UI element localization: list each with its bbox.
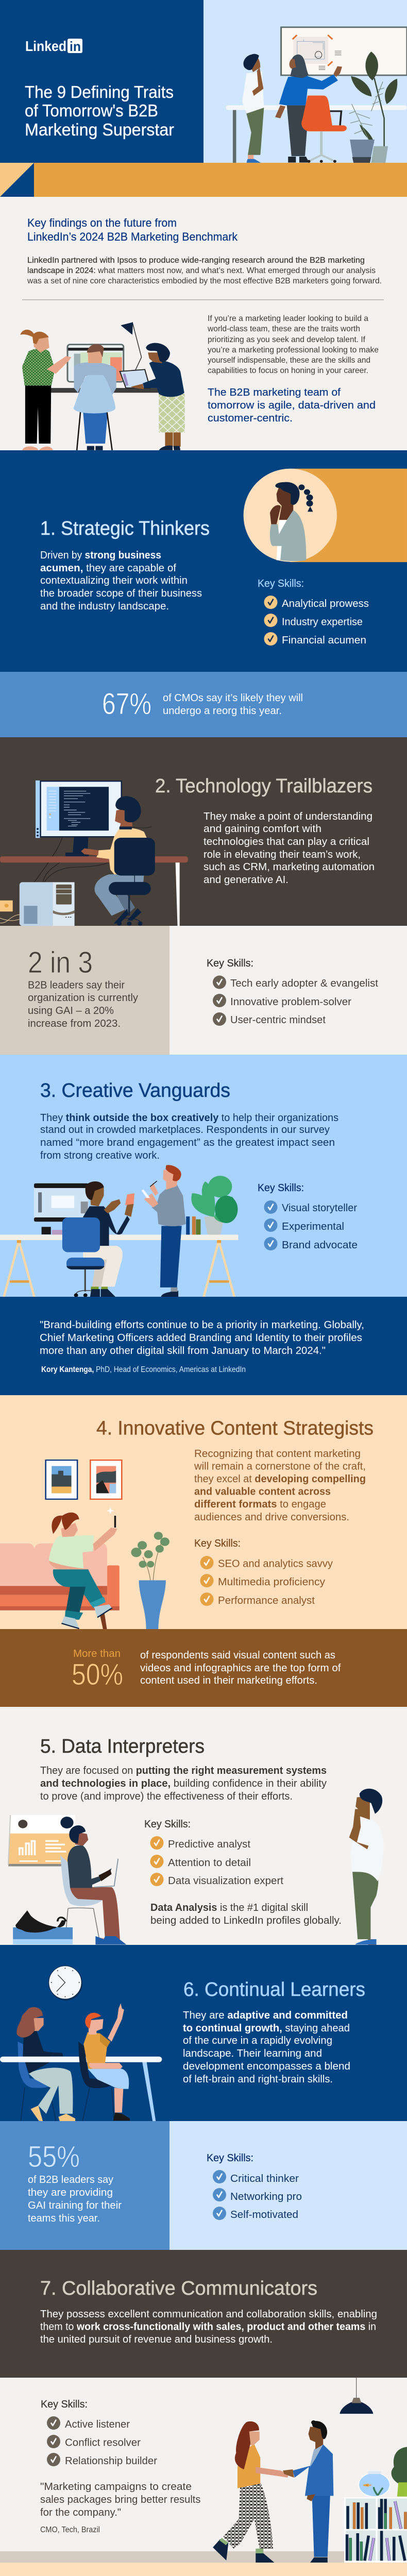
text: why it matters bbox=[207, 314, 379, 375]
body text: named “more brand engagement” as the greatest impact seen bbox=[40, 1137, 335, 1148]
illustration: woman on sofa with phone bbox=[0, 1460, 169, 1629]
heading: 4. Innovative Content Strategists bbox=[96, 1418, 374, 1439]
key skills: User-centric mindset bbox=[230, 1014, 326, 1026]
key skills: SEO and analytics savvy bbox=[218, 1558, 333, 1570]
stat: 2 in 3: 2 in 3 bbox=[28, 946, 93, 979]
quote text bbox=[40, 1319, 364, 1357]
panel: 6 continual learners bbox=[0, 1945, 407, 2121]
key skills: Key Skills: bbox=[207, 2152, 253, 2164]
text: why it matters: yourself indispensable, these are the skills and bbox=[208, 356, 370, 365]
panel: 8 visionary chief marketing officers bbox=[0, 2563, 407, 2576]
chair bbox=[330, 111, 341, 125]
body text bbox=[194, 1448, 366, 1523]
stat band: more than 50%: videos and infographics are the top form of bbox=[140, 1663, 341, 1674]
stat: 55%: 55% bbox=[28, 2140, 80, 2174]
body text: and generative AI. bbox=[204, 874, 289, 886]
quote: for the company." bbox=[40, 2507, 121, 2518]
seated person bbox=[84, 1269, 86, 1292]
panel: 1 strategic thinkers bbox=[0, 450, 407, 672]
stat: 55%: GAI training for their bbox=[28, 2200, 122, 2211]
heading: 5. Data Interpreters bbox=[40, 1736, 205, 1757]
body text: Recognizing that content marketing bbox=[194, 1448, 361, 1460]
stat band: more than 50%: More than bbox=[73, 1648, 121, 1659]
body text: Driven by strong business bbox=[40, 550, 161, 561]
key skills: Innovative problem-solver bbox=[230, 996, 351, 1008]
key skills: Critical thinker bbox=[230, 2173, 299, 2184]
body text: to prove (and improve) the effectiveness of their efforts. bbox=[40, 1791, 293, 1802]
intro paragraph bbox=[27, 256, 382, 285]
title: Marketing Superstar bbox=[25, 120, 174, 139]
panel: 7 collaborative communicators bbox=[0, 2250, 407, 2378]
title: The 9 Defining Traits bbox=[25, 82, 174, 101]
text: why it matters: prioritizing as you seek and develop talent. If bbox=[208, 335, 366, 344]
stat: 55%: they are providing bbox=[28, 2187, 113, 2198]
key skills bbox=[207, 957, 378, 1026]
body text: the united pursuit of revenue and business growth. bbox=[40, 2334, 273, 2345]
intro paragraph: was a set of nine core characteristics embodied by the most effective B2B marketers going forward. bbox=[27, 277, 382, 285]
body text: the broader scope of their business bbox=[40, 588, 202, 599]
stat: 2 in 3: using GAI – a 20% bbox=[28, 1005, 114, 1016]
woman bbox=[223, 2484, 273, 2549]
illustration: analyst at laptop with dog bbox=[8, 1815, 126, 1945]
body text: role in elevating their team’s work, bbox=[204, 849, 361, 860]
attribution: Kory Kantenga, PhD, Head of Economics, Americas at LinkedIn bbox=[41, 1365, 246, 1374]
key skills: Key Skills: bbox=[258, 578, 304, 589]
body text bbox=[40, 1765, 327, 1802]
person A bbox=[246, 108, 264, 155]
illustration: team around a laptop bbox=[20, 322, 185, 450]
heading: 1. Strategic Thinkers bbox=[40, 518, 210, 539]
body text: of the curve in a rapidly evolving bbox=[183, 2035, 332, 2046]
stat: 55%: of B2B leaders say bbox=[28, 2174, 113, 2185]
key skills bbox=[207, 2152, 302, 2221]
body text: contextualizing their work within bbox=[40, 575, 188, 586]
body text: They are focused on putting the right measurement systems bbox=[40, 1765, 327, 1776]
body text: they excel at developing compelling bbox=[194, 1473, 366, 1485]
text: why it matters: If you’re a marketing leader looking to build a bbox=[208, 314, 368, 323]
key skills: Key Skills: bbox=[144, 1818, 191, 1830]
person bbox=[95, 874, 144, 916]
body text: will remain a cornerstone of the craft, bbox=[194, 1461, 366, 1472]
quote: sales packages bring better results bbox=[40, 2494, 201, 2505]
body text: and gaining comfort with bbox=[204, 823, 321, 835]
key skills: Key Skills: bbox=[258, 1182, 304, 1194]
body text: They are adaptive and committed bbox=[183, 2010, 348, 2021]
heading: 7. Collaborative Communicators bbox=[40, 2278, 317, 2299]
heading: key findings bbox=[27, 216, 238, 243]
laptop bbox=[120, 369, 150, 388]
stat band: more than 50% bbox=[0, 1629, 407, 1707]
title: of Tomorrow's B2B bbox=[25, 101, 158, 120]
body text: and technologies in place, building confidence in their ability bbox=[40, 1778, 327, 1789]
illustration: thinker in circle bbox=[244, 469, 407, 562]
key skills: Attention to detail bbox=[168, 1857, 251, 1869]
key skills: Key Skills: bbox=[207, 957, 253, 969]
key skills: Performance analyst bbox=[218, 1595, 315, 1606]
key skills: Visual storyteller bbox=[282, 1202, 357, 1214]
key skills: Key Skills: bbox=[41, 2398, 88, 2410]
panel: 2 stat and key skills bbox=[0, 926, 378, 1055]
body text: landscape. Their learning and bbox=[183, 2048, 322, 2059]
key skills: Multimedia proficiency bbox=[218, 1577, 325, 1588]
orange band with triangle bbox=[0, 163, 407, 197]
panel: 6 stat and key skills bbox=[0, 2121, 407, 2250]
body text: development encompasses a blend bbox=[183, 2061, 350, 2072]
key skills: Predictive analyst bbox=[168, 1839, 250, 1850]
panel: quote from Kory Kantenga bbox=[0, 1297, 407, 1395]
intro paragraph: landscape in 2024: what matters most now, and what’s next. What emerged through our analysis bbox=[27, 266, 376, 275]
quote: "Marketing campaigns to create bbox=[40, 2481, 192, 2493]
text: why it matters: you’re a marketing professional looking to make bbox=[208, 346, 379, 354]
callout: data analysis: Data Analysis is the #1 digital skill bbox=[150, 1902, 308, 1913]
body text: They make a point of understanding bbox=[204, 811, 372, 822]
stat: 2 in 3: increase from 2023. bbox=[28, 1018, 121, 1029]
right person bbox=[159, 394, 185, 432]
logo: LinkedIn: Linked bbox=[25, 38, 66, 54]
panel: 2 technology trailblazers bbox=[0, 737, 407, 926]
body text bbox=[183, 2010, 350, 2085]
panel: 7 key skills and handshake bbox=[0, 2378, 407, 2563]
body text bbox=[40, 1112, 338, 1161]
stat: 55%: teams this year. bbox=[28, 2213, 100, 2224]
key skills bbox=[258, 1182, 358, 1251]
body text: technologies that can play a critical bbox=[204, 836, 369, 848]
key skills: Active listener bbox=[65, 2419, 130, 2430]
body text: They possess excellent communication and collaboration skills, enabling bbox=[40, 2309, 377, 2320]
body text: and valuable content across bbox=[194, 1486, 331, 1498]
quote text: Chief Marketing Officers added Branding and Identity to their profiles bbox=[40, 1332, 362, 1344]
body text: stand out in crowded marketplaces. Respondents in our survey bbox=[40, 1124, 330, 1136]
stat band: 67% bbox=[0, 672, 407, 737]
body text: them to work cross-functionally with sales, product and other teams in bbox=[40, 2321, 376, 2333]
callout: data analysis bbox=[150, 1902, 342, 1926]
heading: key findings: Key findings on the future from bbox=[27, 216, 177, 229]
key skills: Relationship builder bbox=[65, 2455, 157, 2467]
panel: header bbox=[0, 0, 407, 163]
body text bbox=[40, 550, 202, 612]
callout: team of tomorrow: tomorrow is agile, data-driven and bbox=[208, 400, 376, 411]
illustration: two colleagues at a whiteboard bbox=[226, 27, 407, 163]
key skills: Self-motivated bbox=[230, 2209, 298, 2221]
title bbox=[25, 82, 174, 139]
key skills: Networking pro bbox=[230, 2191, 302, 2202]
right student bbox=[82, 2088, 114, 2121]
stat: 55% bbox=[28, 2140, 122, 2224]
body text: acumen, they are capable of bbox=[40, 563, 176, 574]
stat: 2 in 3: B2B leaders say their bbox=[28, 980, 125, 991]
illustration: classroom with clock bbox=[0, 1966, 162, 2121]
logo: LinkedIn: in bbox=[70, 39, 81, 54]
stat band: more than 50%: 50% bbox=[72, 1658, 123, 1691]
heading: 6. Continual Learners bbox=[183, 1979, 365, 2001]
body text bbox=[204, 811, 375, 886]
illustration: standing person thinking bbox=[349, 1789, 384, 1945]
key skills: Tech early adopter & evangelist bbox=[230, 978, 378, 989]
key skills bbox=[194, 1537, 333, 1606]
key skills: Data visualization expert bbox=[168, 1875, 283, 1887]
stat band: more than 50%: content used in their marketing efforts. bbox=[140, 1675, 317, 1686]
body text: and the industry landscape. bbox=[40, 601, 169, 612]
key skills: Brand advocate bbox=[282, 1240, 358, 1251]
key skills: Experimental bbox=[282, 1221, 344, 1232]
stat band: 67%: 67% bbox=[102, 687, 151, 721]
text: why it matters: world-class team, these are the traits worth bbox=[207, 325, 360, 333]
body text: of left-brain and right-brain skills. bbox=[183, 2074, 333, 2085]
stat band: 67%: undergo a reorg this year. bbox=[163, 705, 282, 717]
key skills: Key Skills: bbox=[194, 1537, 241, 1549]
stat band: more than 50%: of respondents said visual content such as bbox=[140, 1650, 335, 1661]
key skills: Analytical prowess bbox=[282, 598, 369, 609]
quote: CMO, Tech, Brazil bbox=[40, 2526, 100, 2534]
callout: data analysis: being added to LinkedIn profiles globally. bbox=[150, 1915, 342, 1926]
stat: 2 in 3: organization is currently bbox=[28, 992, 138, 1004]
standing person bbox=[160, 1226, 182, 1287]
heading: 2. Technology Trailblazers bbox=[155, 775, 372, 797]
panel: 5 data interpreters bbox=[8, 1736, 383, 1945]
key skills: Conflict resolver bbox=[65, 2437, 141, 2448]
panel: 3 creative vanguards bbox=[0, 1055, 407, 1297]
illustration: handshake with bookcase bbox=[213, 2378, 407, 2563]
key skills: Industry expertise bbox=[282, 616, 363, 628]
key skills bbox=[41, 2398, 157, 2467]
body text: such as CRM, marketing automation bbox=[204, 861, 375, 873]
quote text: more than any other digital skill from January to March 2024." bbox=[40, 1345, 326, 1357]
body text: from strong creative work. bbox=[40, 1150, 160, 1161]
illustration: developer at desk bbox=[0, 781, 188, 926]
body text: audiences and drive conversions. bbox=[194, 1512, 349, 1523]
left student bbox=[21, 2088, 56, 2121]
text: why it matters: capabilities to focus on honing in your career. bbox=[208, 366, 368, 375]
person B bbox=[287, 105, 309, 156]
key skills bbox=[144, 1818, 283, 1887]
callout: team of tomorrow: The B2B marketing team of bbox=[208, 387, 341, 398]
heading: 3. Creative Vanguards bbox=[40, 1080, 230, 1101]
intro paragraph: LinkedIn partnered with Ipsos to produce wide-ranging research around the B2B marketing bbox=[27, 256, 365, 265]
body text bbox=[40, 2309, 377, 2345]
stat: 2 in 3 bbox=[28, 946, 138, 1029]
body text: They think outside the box creatively to help their organizations bbox=[40, 1112, 338, 1124]
stat band: 67%: of CMOs say it’s likely they will bbox=[163, 692, 303, 704]
left person bbox=[25, 384, 51, 444]
quote bbox=[40, 2481, 201, 2534]
illustration: creative team at desk bbox=[0, 1165, 238, 1297]
panel: intro bbox=[20, 216, 384, 450]
panel: 4 innovative content strategists bbox=[0, 1395, 407, 1629]
body text: to continual growth, staying ahead bbox=[183, 2023, 350, 2034]
callout: team of tomorrow: customer-centric. bbox=[208, 413, 293, 424]
body text: different formats to engage bbox=[194, 1499, 326, 1510]
key skills: Financial acumen bbox=[282, 635, 366, 646]
heading: key findings: LinkedIn’s 2024 B2B Marketing Benchmark bbox=[27, 230, 238, 243]
quote text: "Brand-building efforts continue to be a priority in marketing. Globally, bbox=[40, 1319, 364, 1331]
callout: team of tomorrow bbox=[208, 387, 376, 424]
center person bbox=[83, 412, 108, 444]
man bbox=[312, 2495, 330, 2557]
key skills bbox=[258, 578, 369, 646]
